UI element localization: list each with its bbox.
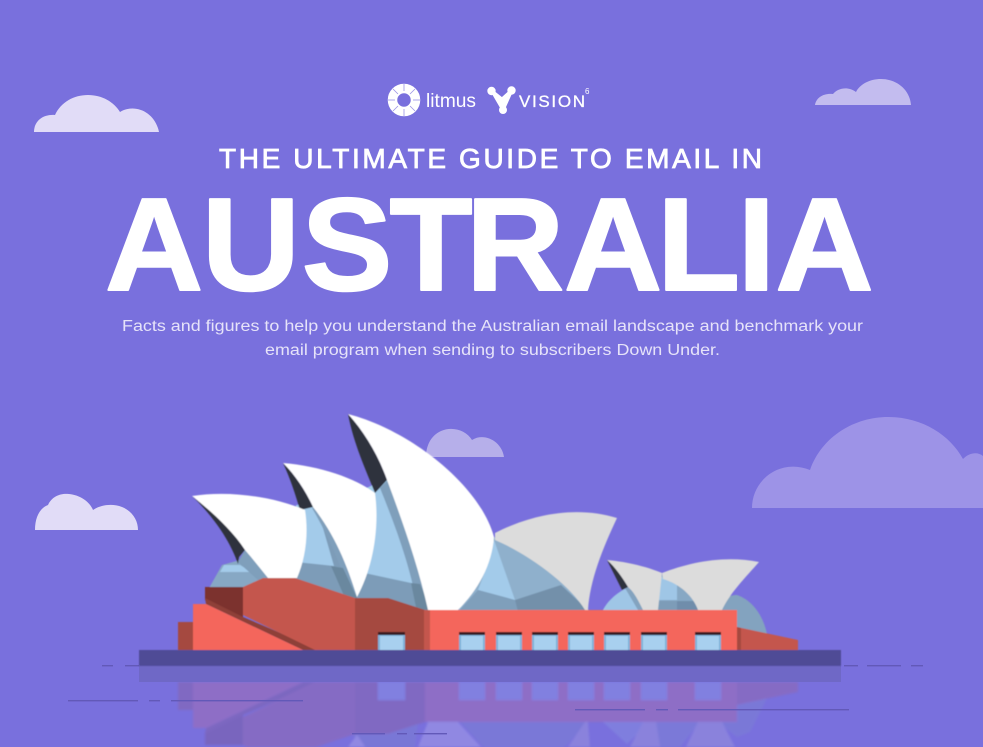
cloud: top right — [815, 79, 911, 105]
glass under left sail — [208, 548, 272, 590]
building: right wing — [737, 627, 798, 650]
illustration: sydney opera house — [139, 414, 841, 666]
dome: far small left band — [625, 586, 645, 610]
glass under grey sail — [458, 537, 590, 612]
building: dark wall — [355, 598, 425, 650]
windows row — [378, 632, 721, 650]
cloud: large right — [752, 417, 983, 508]
wordmark: litmus: litmus — [426, 91, 476, 112]
building: small left step — [178, 622, 193, 650]
sail: left — [192, 494, 307, 578]
cloud: behind the sails — [426, 429, 504, 457]
dome: far small middle — [656, 575, 700, 610]
wordmark: superscript 6: 6 — [585, 87, 590, 96]
building: facade side strip — [424, 610, 430, 650]
glass under big sail — [352, 478, 432, 612]
heading: the ultimate guide: THE ULTIMATE GUIDE TO EMAIL IN — [219, 143, 762, 174]
building: podium shadow strip — [205, 598, 320, 650]
sail: grey rear — [495, 512, 617, 610]
dome: right rear — [715, 595, 767, 634]
dome: far small left — [603, 588, 650, 610]
sail: middle — [283, 463, 376, 597]
sail tip: big — [348, 414, 387, 493]
sail tip: left — [192, 496, 245, 564]
logo: litmus and vision6 — [388, 84, 590, 116]
sail: big front — [348, 414, 494, 610]
cloud: top left — [34, 95, 159, 132]
cloud: mid left — [35, 494, 138, 530]
reflection of platform — [139, 666, 841, 682]
platform base — [139, 650, 841, 666]
glass under middle sail — [290, 504, 360, 600]
subtitle text — [122, 318, 863, 359]
sail: far small right — [662, 559, 759, 610]
building: salmon ramp — [193, 604, 303, 650]
sail tip: far small — [607, 560, 628, 590]
water reflection dashes — [68, 665, 923, 734]
wordmark: vision: VISION — [519, 92, 585, 111]
icon: litmus wheel — [388, 84, 420, 116]
reflection of opera house — [178, 682, 798, 747]
building: stairs roof — [243, 578, 355, 650]
title: australia: AUSTRALIA — [105, 172, 874, 319]
sail tip: middle — [283, 463, 313, 510]
subtitle text: Facts and figures to help you understand the Australian email landscape and benchmark your — [122, 318, 863, 335]
sail: far small left — [607, 560, 662, 610]
icon: vision6 mark — [487, 86, 516, 114]
building: darkest podium block — [205, 587, 243, 620]
building: main facade — [425, 610, 737, 650]
subtitle text: email program when sending to subscribers Down Under. — [265, 342, 720, 359]
